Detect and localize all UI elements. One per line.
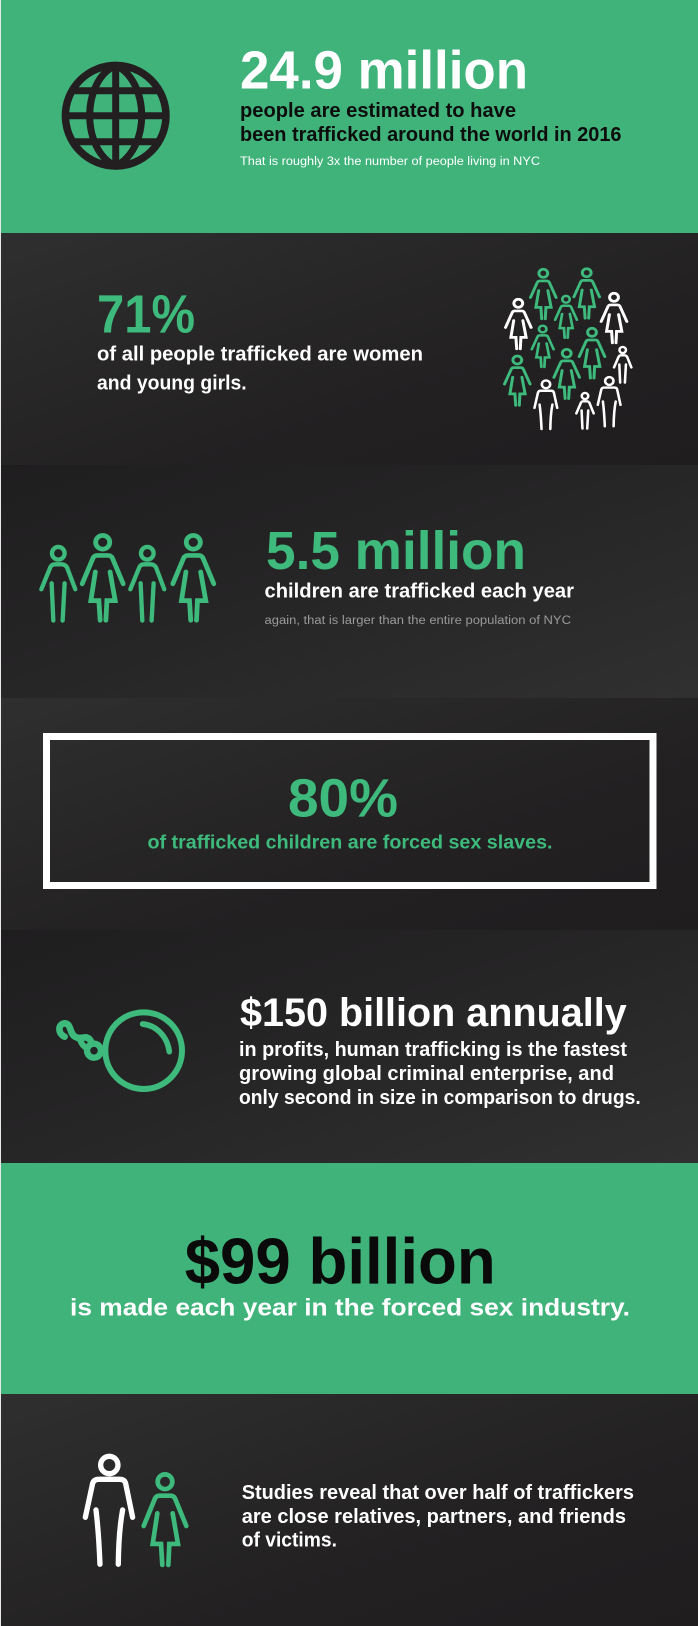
text: only second: only second in size in comparison to drugs. — [239, 1086, 641, 1109]
icon: crowd of people — [504, 269, 631, 429]
text: people are estimated: people are estimated to have — [240, 99, 516, 122]
text: and young girls: and young girls. — [97, 371, 247, 394]
text: been trafficked: been trafficked around the world in 2016 — [240, 123, 622, 146]
headline: 80%: 80% — [288, 769, 398, 829]
text: children trafficked: children are trafficked each year — [264, 580, 574, 603]
text: of all people trafficked: of all people trafficked are women — [97, 343, 423, 366]
text: in profits: in profits, human trafficking is the fastest — [239, 1038, 627, 1061]
panel: $99 billion — [0, 1163, 698, 1394]
icon: man and woman — [85, 1456, 186, 1565]
text: NYC comparison: That is roughly 3x the number of people living in NYC — [240, 156, 540, 168]
panel: 24.9 million trafficked — [0, 0, 698, 233]
panel: traffickers are close relatives — [0, 1394, 698, 1626]
text: forced sex slaves: of trafficked children are forced sex slaves. — [148, 832, 552, 854]
text: studies reveal: Studies reveal that over half of traffickers — [242, 1481, 634, 1504]
panel: 80% sex slaves — [0, 698, 698, 930]
text: forced sex industry: is made each year in the forced sex industry. — [70, 1294, 630, 1321]
icon: four green figures — [41, 535, 214, 621]
headline: 24.9 million: 24.9 million — [240, 40, 528, 100]
callout frame — [46, 736, 653, 886]
panel: $150 billion annually — [0, 930, 698, 1163]
text: growing global: growing global criminal enterprise, and — [239, 1062, 614, 1085]
headline: 71%: 71% — [97, 285, 195, 345]
headline: 5.5 million: 5.5 million — [266, 521, 526, 581]
headline: $150 billion annually: $150 billion annually — [240, 991, 627, 1035]
text: of victims: of victims. — [242, 1529, 337, 1552]
panel: 5.5 million children — [0, 465, 698, 698]
panel: 71% women and girls — [0, 233, 698, 465]
headline: $99 billion: $99 billion — [185, 1224, 496, 1297]
text: NYC population: again, that is larger than the entire population of NYC — [264, 615, 571, 627]
text: close relatives: are close relatives, partners, and friends — [242, 1505, 626, 1528]
icon: globe — [65, 65, 166, 166]
icon: ball and chain — [59, 1012, 182, 1089]
